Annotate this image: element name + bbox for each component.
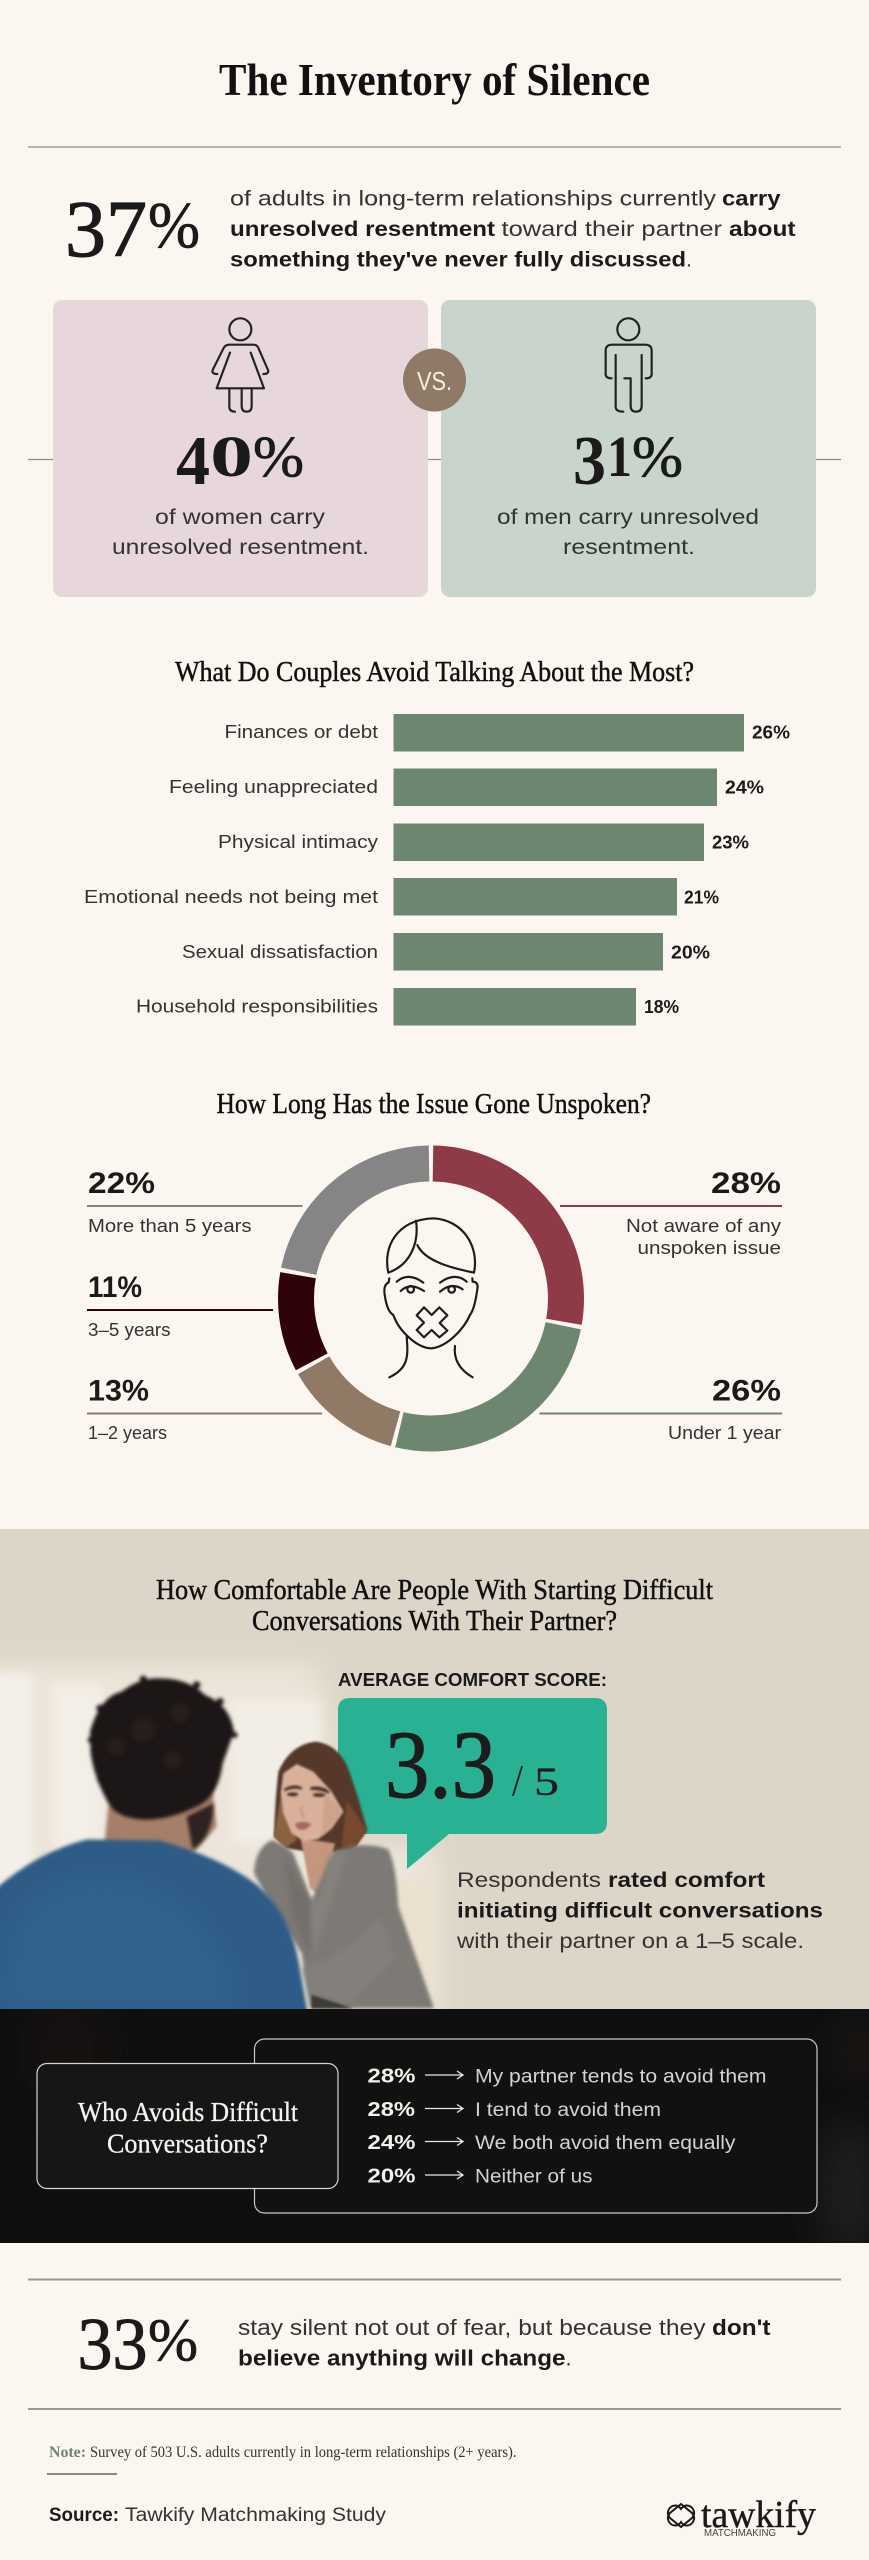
callout: 22 percent [87, 1167, 302, 1236]
stat: 37 percent [65, 186, 200, 274]
stat: 40 percent: 4 [176, 423, 210, 500]
callout: 28 percent: Not aware of any [626, 1216, 781, 1236]
row: both avoid: 24% [368, 2132, 416, 2154]
text: comfort description [456, 1869, 823, 1953]
text: resentment summary: unresolved resentment [230, 218, 495, 241]
callout: 13 percent: 1–2 years [88, 1423, 167, 1443]
bar: sexual dissatisfaction [182, 933, 710, 970]
stat: 40 percent: % [253, 424, 304, 489]
text: silence reason: don't [712, 2315, 771, 2340]
text: men caption: of men carry unresolved [497, 506, 759, 529]
row: neither: 20% [368, 2166, 416, 2188]
bar: finances: Finances or debt [224, 721, 378, 742]
heading: how long unspoken: How Long Has the Issue Gone Unspoken? [216, 1089, 651, 1120]
text: comfort description: rated comfort [608, 1869, 765, 1892]
text: comfort description: Respondents [457, 1869, 601, 1892]
text: resentment summary: carry [722, 188, 781, 210]
question box: Conversations? [107, 2128, 268, 2158]
icon: knot [668, 2504, 694, 2527]
stat: 31 percent [573, 423, 683, 500]
stat: 3.3 out of 5: / [512, 1756, 524, 1805]
callout: 22 percent: 22% [88, 1167, 155, 1200]
text: resentment summary: toward their partner [502, 218, 722, 241]
text: women caption [112, 506, 369, 559]
bar: emotional needs: Emotional needs not being met [84, 886, 378, 907]
row: neither [368, 2166, 592, 2188]
text: silence reason: believe anything will change [238, 2346, 566, 2370]
stat: 3.3 out of 5: 5 [534, 1759, 559, 1804]
panel: who avoids [0, 2000, 869, 2260]
panel: men [441, 300, 816, 597]
callout: 13 percent: 13% [88, 1374, 149, 1408]
row: partner avoids: My partner tends to avoid them [475, 2066, 766, 2088]
callout: 13 percent [87, 1374, 322, 1443]
bar: sexual dissatisfaction: 20% [671, 942, 710, 962]
row: partner avoids [368, 2066, 766, 2088]
text: men caption [497, 506, 759, 559]
bar: intimacy: Physical intimacy [218, 831, 379, 852]
text: comfort description: initiating difficult conversations [457, 1900, 823, 1922]
stat: 31 percent: 3 [573, 423, 606, 500]
text: resentment summary: of adults in long-term relationships currently [230, 188, 717, 210]
logo: tawkify: MATCHMAKING [704, 2528, 776, 2539]
panel: comfort score [0, 1529, 869, 2009]
row: both avoid [368, 2132, 736, 2154]
callout: 26 percent [540, 1374, 782, 1443]
heading: comfort question [156, 1575, 713, 1637]
stat: 31 percent: % [632, 424, 683, 489]
callout: 28 percent [560, 1167, 782, 1258]
callout: 26 percent: 26% [712, 1374, 781, 1408]
stat: 40 percent: 0 [210, 424, 253, 489]
callout: 11 percent: 11% [88, 1271, 142, 1304]
heading: avoided topics: What Do Couples Avoid Talking About the Most? [175, 657, 694, 688]
row: I avoid: 28% [368, 2099, 415, 2121]
bar: household [136, 988, 679, 1026]
text: resentment summary [230, 188, 796, 272]
row: I avoid [368, 2099, 661, 2121]
stat: 31 percent: 1 [607, 424, 632, 489]
label: average comfort score: AVERAGE COMFORT SCORE: [338, 1670, 607, 1690]
badge: versus [403, 348, 466, 412]
icon: woman [212, 318, 268, 412]
stat: 3.3 out of 5 [385, 1711, 559, 1818]
stat: 33 percent [78, 2304, 198, 2386]
text: resentment summary: something they've never fully discussed [230, 248, 686, 272]
callout: 22 percent: More than 5 years [88, 1216, 252, 1236]
bar: unappreciated [169, 768, 764, 806]
panel: women [53, 300, 428, 597]
bar: finances [224, 714, 790, 752]
title: The Inventory of Silence [219, 54, 650, 105]
callout: 11 percent: 3–5 years [88, 1320, 170, 1340]
bar: household: Household responsibilities [136, 996, 378, 1016]
row: both avoid: We both avoid them equally [475, 2133, 736, 2154]
bar: sexual dissatisfaction: Sexual dissatisfaction [182, 941, 378, 962]
stat: 37 percent: % [148, 189, 200, 262]
bar chart: avoided topics [84, 714, 790, 1026]
bar: unappreciated: 24% [725, 778, 764, 798]
text: silence reason: stay silent not out of fear, but because they [238, 2315, 706, 2340]
logo: tawkify: tawkify [701, 2494, 816, 2536]
source: Source: [49, 2505, 119, 2526]
bar: emotional needs: 21% [684, 888, 719, 908]
results outline box [254, 2039, 817, 2213]
stat: 40 percent [176, 423, 304, 500]
photo: man [0, 1676, 308, 2017]
row: I avoid: I tend to avoid them [475, 2100, 661, 2121]
donut chart: time unspoken [296, 1164, 566, 1434]
callout: 11 percent [87, 1271, 273, 1340]
stat: 33 percent: 33 [78, 2304, 148, 2386]
question box: Who Avoids Difficult [78, 2097, 298, 2127]
row: partner avoids: 28% [368, 2066, 416, 2088]
heading: comfort question: Conversations With Their Partner? [252, 1606, 617, 1637]
icon: man [606, 318, 652, 412]
callout: 26 percent: Under 1 year [668, 1423, 781, 1443]
bar: unappreciated: Feeling unappreciated [169, 776, 378, 797]
bar: intimacy: 23% [712, 832, 749, 852]
text: comfort description: with their partner on a 1–5 scale. [456, 1930, 804, 1953]
photo: blurred room background [0, 1662, 442, 2009]
row: neither: Neither of us [475, 2166, 592, 2188]
heading: comfort question: How Comfortable Are People With Starting Difficult [156, 1575, 713, 1606]
speech bubble [338, 1698, 607, 1869]
text: silence reason [238, 2315, 771, 2370]
photo: woman [254, 1742, 434, 2008]
badge: versus: VS. [417, 366, 452, 396]
stat: 37 percent: 37 [65, 186, 147, 274]
text: women caption: of women carry [155, 506, 326, 529]
source: Tawkify Matchmaking Study [125, 2505, 387, 2526]
text: resentment summary: . [686, 248, 692, 272]
callout: 28 percent: unspoken issue [638, 1238, 781, 1258]
note: Note: [49, 2444, 86, 2461]
callout: 28 percent: 28% [711, 1167, 781, 1200]
text: women caption: unresolved resentment. [112, 536, 369, 559]
question box [37, 2064, 338, 2188]
dark photo background [0, 2000, 869, 2260]
stat: 3.3 out of 5: 3.3 [385, 1711, 496, 1818]
icon: face with taped mouth [384, 1218, 478, 1377]
text: men caption: resentment. [563, 536, 695, 559]
stat: 33 percent: % [148, 2307, 198, 2373]
bar: finances: 26% [752, 722, 790, 742]
bar: emotional needs [84, 878, 719, 916]
note: Survey of 503 U.S. adults currently in long-term relationships (2+ years). [90, 2444, 516, 2461]
text: resentment summary: about [729, 218, 796, 241]
bar: household: 18% [644, 997, 679, 1017]
bar: intimacy [218, 824, 749, 861]
source [49, 2505, 387, 2526]
text: silence reason: . [566, 2346, 572, 2370]
